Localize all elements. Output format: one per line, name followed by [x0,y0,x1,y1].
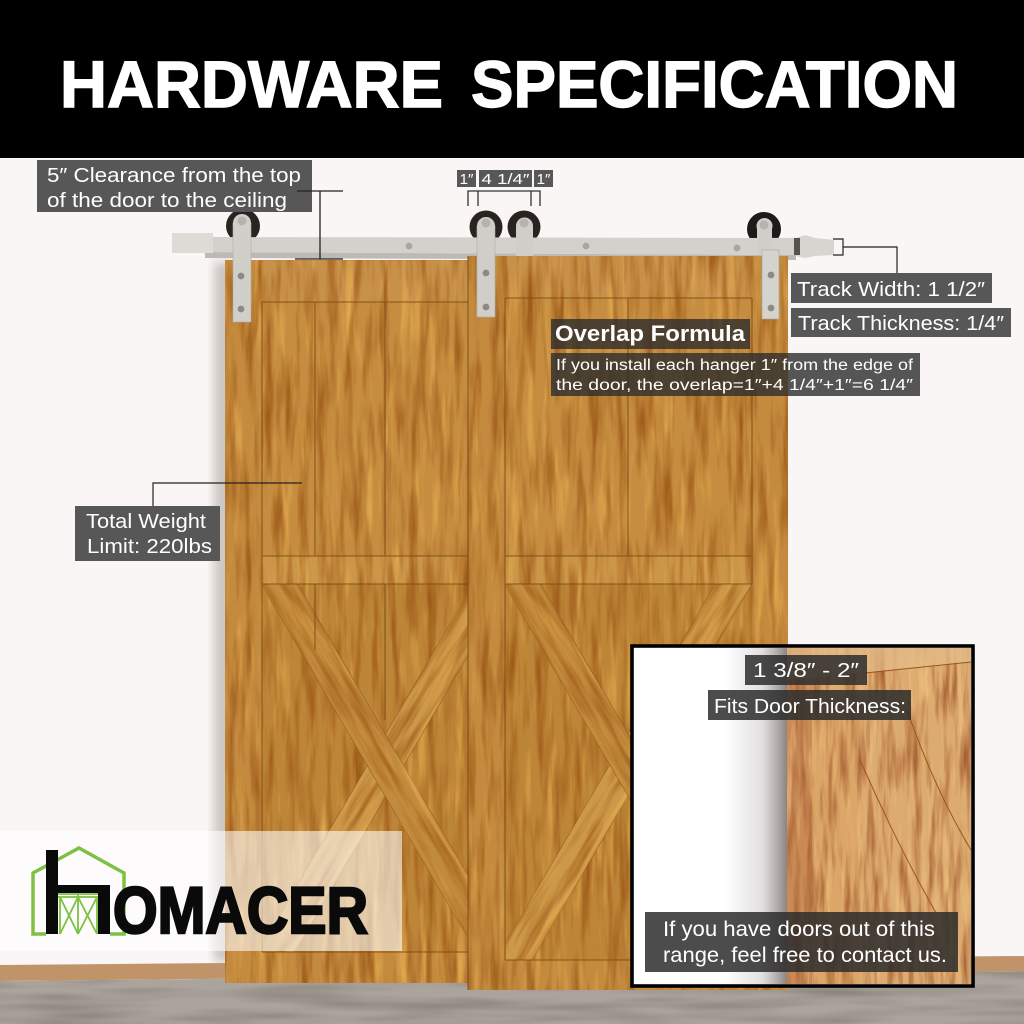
leader line: weight [153,483,302,506]
inset label: contact note [645,912,958,972]
callout: total weight limit [75,506,220,561]
left door upper panel [262,302,468,556]
callout: hanger spacing: 1″ [536,171,551,188]
hanger right [756,218,779,319]
right door middle rail [505,556,752,584]
callout: ceiling clearance: 5″ Clearance from the top [47,165,301,187]
left end stop [172,233,213,253]
logo: Homacer [33,848,368,947]
right door X brace [505,584,752,960]
left door lower panel [262,584,468,952]
callout: ceiling clearance [37,160,312,212]
hanger centre-right [516,218,533,256]
title: HARDWARE [60,47,443,121]
right barn door [467,256,788,1024]
right end stop [796,235,834,258]
callout: track thickness [791,308,1011,337]
inset label: thickness range [745,655,867,685]
inset door close-up [787,648,971,984]
dimension bracket: track [833,239,897,273]
door shadow on wall [214,262,244,962]
right door top rail [505,256,752,298]
icon: black letter H [46,850,110,934]
inset label: contact note: If you have doors out of this [663,917,935,941]
title: SPECIFICATION [471,47,958,121]
right door upper panel [505,298,752,556]
inset label: thickness range: 1 3/8″ - 2″ [753,659,859,682]
callout: overlap formula text: the door, the overlap=1″+4 1/4″+1″=6 1/4″ [556,377,914,394]
left barn door [225,260,468,983]
callout: track width: Track Width: 1 1/2″ [797,279,985,301]
inset border [632,646,973,986]
icon: green barn door [55,893,101,934]
inset panel: door thickness [632,646,973,986]
hanger centre-left [477,217,495,317]
hanger left [233,214,251,322]
icon: green barn outline [33,848,124,934]
left door top rail [262,261,468,302]
inset label: contact note: range, feel free to contact us. [663,943,947,967]
baseboard [0,956,1024,981]
dimension bracket: hanger spacing [468,191,540,206]
inset label: fits door thickness: Fits Door Thickness: [714,695,906,718]
title [60,47,958,121]
callout: overlap formula text: If you install each hanger 1″ from the edge of [556,357,914,374]
callout: ceiling clearance: of the door to the ceiling [47,190,287,212]
inset shadow beside door edge [725,648,787,984]
wooden floor [0,971,1024,1024]
callout: track thickness: Track Thickness: 1/4″ [798,313,1004,335]
callout: overlap formula text [551,353,920,396]
logo: Homacer: OMACER [113,873,368,947]
logo panel [0,831,402,951]
header bar [0,0,1024,158]
callout: hanger spacing [457,170,553,188]
sliding wheels [226,209,781,246]
left door X brace [262,584,468,952]
sliding track [172,233,834,260]
callout: hanger spacing: 1″ [460,171,474,188]
callout: track width [791,273,992,303]
callout: hanger spacing: 4 1/4″ [482,171,530,188]
callout: total weight limit: Limit: 220lbs [87,535,212,558]
right door lower panel [505,584,752,960]
left door middle rail [262,556,468,584]
callout: total weight limit: Total Weight [86,510,206,533]
dimension bracket: clearance [295,191,343,259]
callout: overlap formula heading: Overlap Formula [555,321,746,346]
